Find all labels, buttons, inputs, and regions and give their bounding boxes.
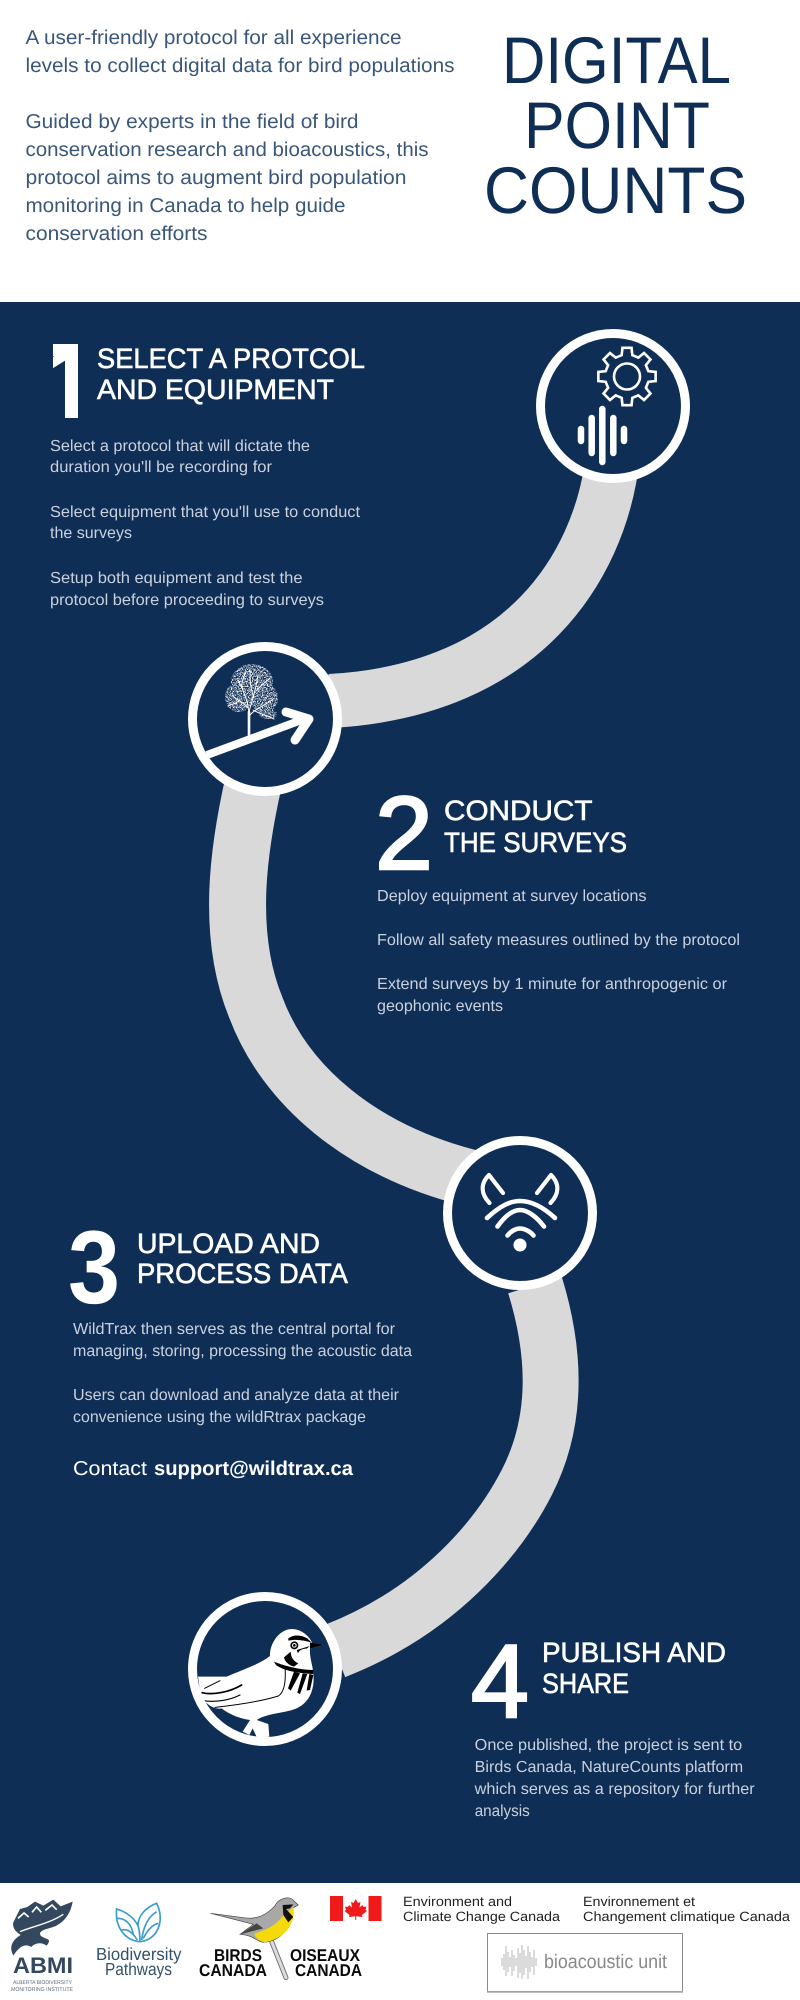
intro text: conservation research and bioacoustics, this [26,139,428,161]
heading 1: SELECT A PROTCOL [97,343,365,374]
body 3: WildTrax then serves as the central portal for [73,1321,396,1338]
icon: wifi fox [483,1175,557,1252]
logo text: Environment and Climate Change Canada: Changement climatique Canada [583,1909,791,1924]
logo: bioacoustic unit: bioacoustic unit [544,1951,668,1973]
number 3: 3 [68,1210,120,1326]
intro text: protocol aims to augment bird population [26,167,406,189]
contact line: support@wildtrax.ca [154,1458,354,1480]
contact line: Contact [73,1458,147,1480]
body 3: convenience using the wildRtrax package [73,1409,366,1426]
body 2: geophonic events [377,998,503,1015]
step 3 [68,1210,412,1480]
body 3: managing, storing, processing the acoustic data [73,1343,412,1360]
logo: Birds Canada [199,1898,362,1980]
node 4: bird [192,1596,338,1742]
number 2: 2 [375,776,433,892]
intro text [26,27,454,245]
icon: tree [225,664,278,735]
heading 4 [542,1637,726,1699]
intro text: monitoring in Canada to help guide [26,195,346,217]
logo text: Environment and Climate Change Canada: Climate Change Canada [403,1909,561,1924]
intro text: Guided by experts in the field of bird [26,111,358,133]
step 1 [44,325,365,609]
intro text: conservation efforts [26,223,208,245]
body 1: protocol before proceeding to surveys [50,592,324,609]
intro text: levels to collect digital data for bird populations [26,55,454,77]
heading 3 [137,1228,348,1289]
body 1 [50,438,361,609]
node 3: wifi fox [448,1140,592,1286]
heading 2: THE SURVEYS [444,827,627,858]
body 1: duration you'll be recording for [50,459,273,476]
body 4: Once published, the project is sent to [475,1737,742,1754]
body 2 [377,888,740,1015]
logo text: Environment and Climate Change Canada [403,1894,791,1924]
heading 1: AND EQUIPMENT [97,374,334,405]
logo: Birds Canada: CANADA [199,1961,267,1980]
title: COUNTS [484,153,747,227]
icon: gear [598,348,656,405]
icon: arrow [207,712,309,755]
number 1: 1 [44,325,102,441]
step 4 [471,1624,755,1820]
intro text: A user-friendly protocol for all experience [26,27,402,49]
logo: Canadian flag [330,1896,382,1921]
logo: ABMI: ALBERTA BIODIVERSITY [13,1980,72,1986]
logo: Biodiversity Pathways: Biodiversity [96,1944,182,1964]
heading 3: UPLOAD AND [137,1228,320,1259]
heading 1 [97,343,365,405]
body 1: the surveys [50,525,132,542]
body 4 [474,1737,755,1820]
logo: ABMI: ABMI [13,1953,73,1978]
step 2 [375,776,740,1015]
panel: navy band [0,302,800,1883]
heading 4: SHARE [542,1668,629,1699]
body 3 [73,1321,412,1426]
title: DIGITAL [502,23,731,97]
body 4: Birds Canada, NatureCounts platform [475,1759,743,1776]
heading 3: PROCESS DATA [137,1258,348,1289]
heading 2: CONDUCT [444,795,592,826]
heading 4: PUBLISH AND [542,1637,726,1668]
heading 2 [444,795,627,858]
logo: Biodiversity Pathways: Pathways [105,1959,172,1979]
logo: bioacoustic unit [487,1934,683,1992]
logo: ABMI [11,1900,73,1993]
connector path between steps [238,470,611,1651]
body 4: which serves as a repository for further [474,1781,755,1798]
body 3: Users can download and analyze data at their [73,1387,400,1404]
icon: sound wave [581,409,624,462]
body 2: Deploy equipment at survey locations [377,888,646,905]
logo: Birds Canada: BIRDS [214,1946,262,1965]
body 4: analysis [475,1803,530,1820]
node 2: tree and arrow [192,646,338,792]
title: POINT [524,88,710,162]
body 1: Setup both equipment and test the [50,570,303,587]
body 2: Follow all safety measures outlined by the protocol [377,932,740,949]
number 4: 4 [471,1624,529,1740]
icon: waveform [502,1945,536,1979]
node 1: gear and sound wave [540,334,686,478]
logo: Birds Canada: CANADA [295,1961,362,1980]
body 1: Select a protocol that will dictate the [50,438,310,455]
logo: ABMI: MONITORING INSTITUTE [11,1987,73,1993]
icon: horned lark bird [198,1629,324,1738]
logo: Biodiversity Pathways [96,1903,182,1979]
body 2: Extend surveys by 1 minute for anthropogenic or [377,976,728,993]
title [484,23,747,227]
logo: Birds Canada: OISEAUX [290,1946,361,1965]
body 1: Select equipment that you'll use to conduct [50,504,361,521]
logo text: Environment and Climate Change Canada: Environnement et [583,1894,695,1909]
number 1 [53,344,78,418]
logo text: Environment and Climate Change Canada: Environment and [403,1894,512,1909]
